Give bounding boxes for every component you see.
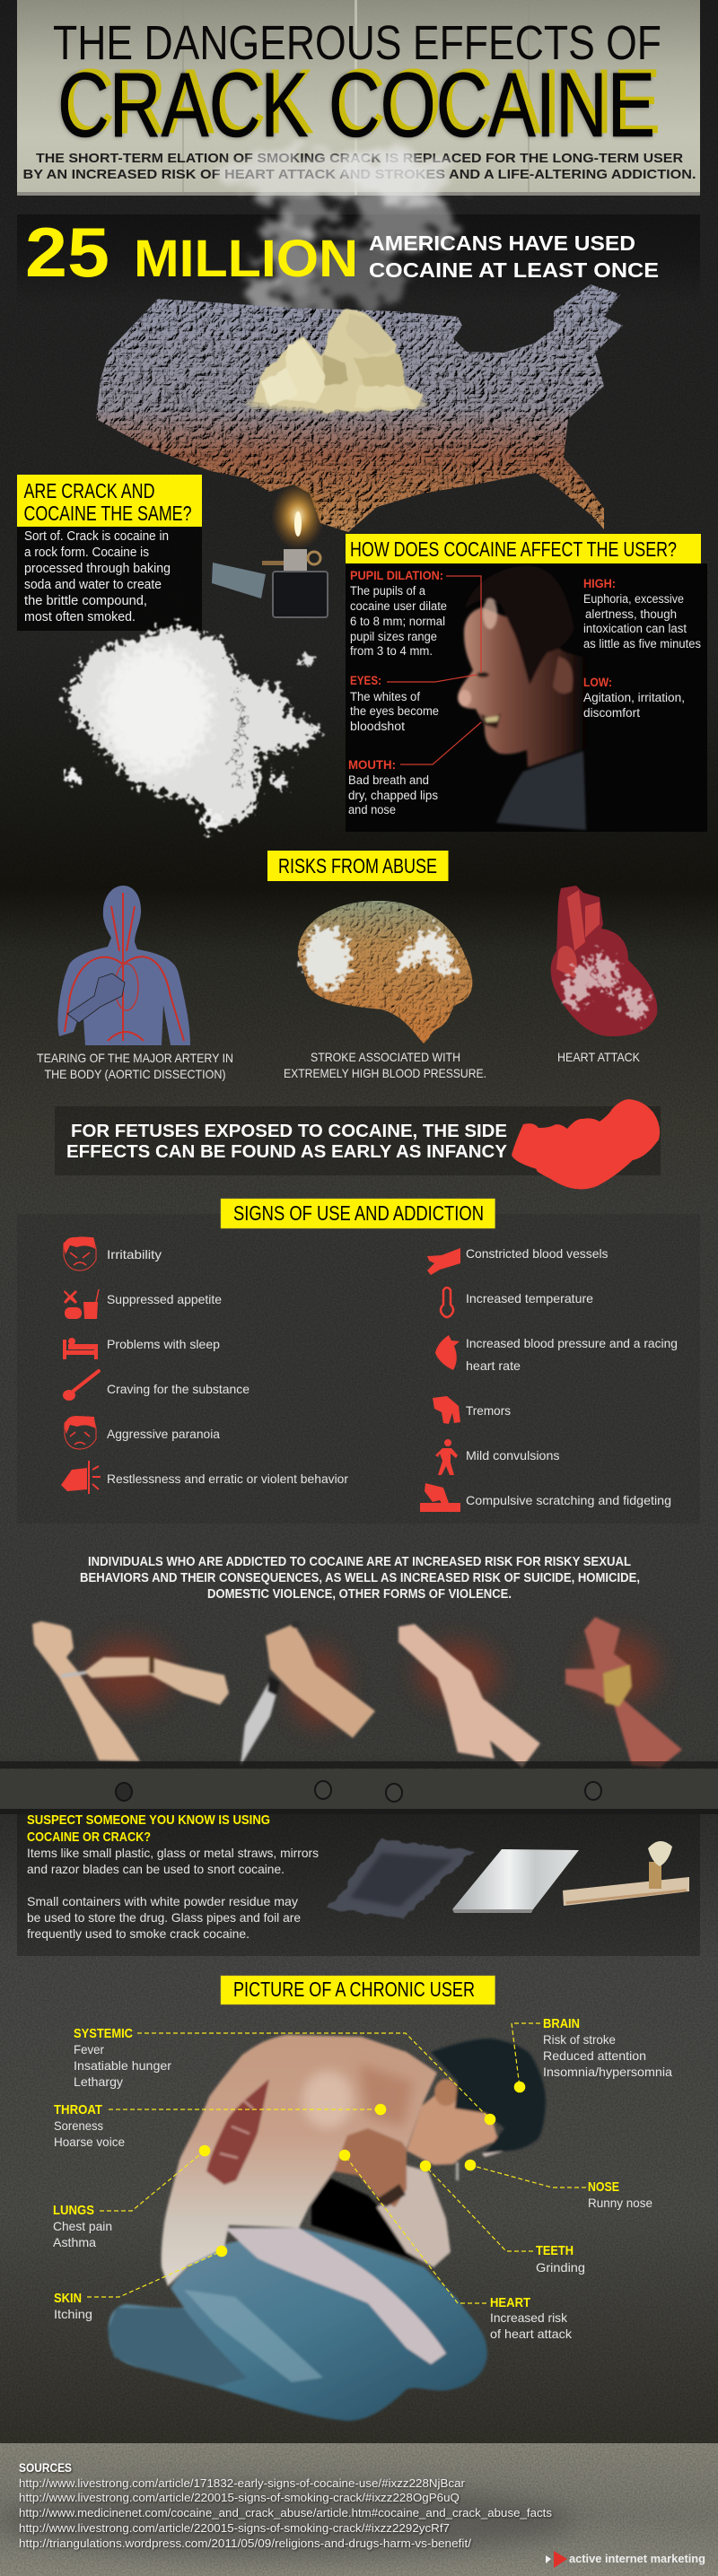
body text: most often smoked.: [24, 609, 136, 624]
callout: pupil dilation: pupil sizes range: [350, 630, 437, 643]
callout: pupil dilation: from 3 to 4 mm.: [350, 644, 433, 658]
icon: lighter: [212, 482, 328, 617]
callout: lungs: Chest pain: [53, 2219, 112, 2233]
heading: [221, 1199, 495, 1228]
callout: high: HIGH:: [583, 576, 616, 590]
red splatters: [87, 1635, 657, 1727]
section: picture of a chronic user: [53, 1976, 672, 2421]
blood pressure text: Increased blood pressure and a racing: [466, 1336, 678, 1350]
callout: throat: Soreness: [54, 2118, 103, 2133]
callout: teeth: Grinding: [536, 2260, 585, 2275]
yellow heading: COCAINE THE SAME?: [23, 502, 192, 525]
callout: eyes: the eyes become: [350, 704, 439, 718]
callout: lungs: [53, 2145, 210, 2249]
text block: increased risks: BEHAVIORS AND THEIR CONSEQUENCES, AS WELL AS INCREASED RISK OF SUICIDE, HOMICIDE,: [80, 1571, 640, 1585]
callout: low: discomfort: [583, 706, 640, 720]
arm with knife: [241, 1621, 375, 1766]
illustration: kneeling man: [108, 2035, 546, 2421]
heading: PICTURE OF A CHRONIC USER: [233, 1978, 475, 2001]
right column items: Tremors: [466, 1403, 511, 1418]
left column items: Aggressive paranoia: [107, 1427, 220, 1441]
callout: pupil dilation: [350, 568, 481, 673]
headline: 25 million: MILLION: [134, 230, 358, 288]
icon: convulsing person: [435, 1439, 458, 1475]
icon: bed: [63, 1338, 98, 1359]
body text: [17, 527, 202, 631]
white cocaine powder pile: [64, 625, 320, 830]
callout: skin: SKIN: [54, 2291, 82, 2306]
headline: 25 million: 25: [25, 213, 109, 292]
callout: mouth: and nose: [348, 803, 396, 816]
icon: glass pipe: [563, 1841, 689, 1906]
callout: mouth: MOUTH:: [348, 757, 396, 772]
callout: pupil dilation: 6 to 8 mm; normal: [350, 615, 445, 628]
icon: food crossed out: [64, 1289, 99, 1319]
heading: [221, 1976, 495, 2004]
text block: increased risks: INDIVIDUALS WHO ARE ADDICTED TO COCAINE ARE AT INCREASED RISK FOR RISKY SEXUAL: [88, 1555, 631, 1569]
left column items: Restlessness and erratic or violent behavior: [107, 1471, 348, 1486]
panel: suspect someone you know: [17, 1812, 700, 1956]
statistic band: [17, 214, 700, 304]
right column items: Increased temperature: [466, 1291, 593, 1305]
body text: the brittle compound,: [24, 593, 147, 608]
heading: SIGNS OF USE AND ADDICTION: [233, 1201, 484, 1225]
callout: brain: BRAIN: [543, 2016, 580, 2031]
panel background: [346, 563, 707, 832]
callout: nose: Runny nose: [588, 2196, 652, 2210]
icon: tremor hand: [433, 1396, 460, 1424]
americans have used: COCAINE AT LEAST ONCE: [369, 258, 659, 282]
source links: http://www.livestrong.com/article/220015-signs-of-smoking-crack/#ixzz2292ycRf7: [19, 2521, 450, 2535]
headline: 25 million: [25, 213, 659, 292]
right column items: [420, 1246, 678, 1512]
left column items: Irritability: [107, 1247, 162, 1262]
subtitle: THE SHORT-TERM ELATION OF SMOKING CRACK IS REPLACED FOR THE LONG-TERM USER: [36, 151, 683, 166]
text block: increased risks: [80, 1555, 640, 1602]
yellow heading: ARE CRACK AND: [23, 479, 154, 502]
body text: be used to store the drug. Glass pipes and foil are: [27, 1910, 301, 1925]
callout: heart: HEART: [490, 2295, 530, 2310]
callout: brain: Insomnia/hypersomnia: [543, 2065, 672, 2079]
body text: Items like small plastic, glass or metal straws, mirrors: [27, 1846, 319, 1860]
callout: lungs: LUNGS: [53, 2203, 94, 2218]
heading: [27, 1812, 270, 1845]
body text: a rock form. Cocaine is: [24, 545, 149, 560]
callout: brain: Reduced attention: [543, 2048, 646, 2063]
arm gripped: [398, 1624, 540, 1768]
callout: heart: [339, 2150, 573, 2341]
callout: systemic: [74, 2026, 495, 2125]
arm bound with rope: [565, 1617, 682, 1768]
exposed lungs: [206, 2079, 269, 2185]
callout: mouth: Bad breath and: [348, 773, 429, 787]
icon: scratching hand: [420, 1483, 460, 1512]
subtitle: [23, 151, 696, 182]
body text: soda and water to create: [24, 577, 162, 592]
callout: systemic: SYSTEMIC: [74, 2026, 133, 2041]
source links: http://www.livestrong.com/article/220015-signs-of-smoking-crack/#ixzz228OgP6uQ: [19, 2491, 460, 2504]
section: risks from abuse: [37, 851, 657, 1081]
caption: HEART ATTACK: [557, 1050, 641, 1064]
metal bar: [0, 1761, 718, 1814]
yellow heading: [17, 475, 202, 527]
caption: EXTREMELY HIGH BLOOD PRESSURE.: [284, 1066, 486, 1080]
callout: nose: NOSE: [588, 2179, 619, 2195]
source links: http://www.livestrong.com/article/171832-early-signs-of-cocaine-use/#ixzz228NjBcar: [19, 2476, 466, 2490]
right column items: Mild convulsions: [466, 1448, 560, 1463]
illustration: heart: [551, 886, 657, 1036]
forearm and hand: [377, 2165, 451, 2267]
heading: COCAINE OR CRACK?: [27, 1829, 151, 1845]
callout: skin: [54, 2246, 227, 2321]
callout: pupil dilation: PUPIL DILATION:: [350, 568, 443, 582]
callout: heart: of heart attack: [490, 2327, 573, 2341]
body text: processed through baking: [24, 561, 171, 576]
callout: fetuses exposed to cocaine: EFFECTS CAN BE FOUND AS EARLY AS INFANCY: [66, 1142, 508, 1162]
icon: angry face: [64, 1237, 96, 1271]
caption: THE BODY (AORTIC DISSECTION): [45, 1067, 226, 1081]
callout: mouth: dry, chapped lips: [348, 789, 438, 802]
heading: [267, 851, 449, 881]
smoke: [215, 148, 458, 325]
source links: [19, 2476, 553, 2550]
head: face: [407, 2086, 498, 2165]
crack rocks: [247, 310, 426, 412]
callout: throat: THROAT: [54, 2102, 102, 2118]
callout: high: Euphoria, excessive: [583, 592, 684, 606]
callout: eyes: EYES:: [350, 673, 381, 687]
illustration: body with arteries: [57, 886, 190, 1045]
caption: [284, 1050, 486, 1080]
callout: systemic: Lethargy: [74, 2074, 123, 2089]
source links: http://triangulations.wordpress.com/2011/05/09/religions-and-drugs-harm-vs-benefit/: [19, 2537, 471, 2550]
callout: eyes: bloodshot: [350, 720, 405, 733]
callout: eyes: The whites of: [350, 690, 420, 703]
head: hair: [431, 2039, 546, 2153]
left column items: [61, 1237, 348, 1494]
sources heading: SOURCES: [19, 2460, 72, 2475]
illustration: four violent arms: [32, 1617, 682, 1768]
icon: paranoid face: [65, 1416, 96, 1449]
callout: systemic: Insatiable hunger: [74, 2058, 171, 2073]
callout: low: LOW:: [583, 675, 612, 689]
left column items: Suppressed appetite: [107, 1292, 222, 1306]
forearm resting on thigh: [224, 2228, 446, 2364]
heading: SUSPECT SOMEONE YOU KNOW IS USING: [27, 1812, 270, 1828]
americans have used: AMERICANS HAVE USED: [369, 231, 635, 255]
blood pressure text: heart rate: [466, 1358, 521, 1373]
arm with razor: [32, 1621, 229, 1761]
subtitle: BY AN INCREASED RISK OF HEART ATTACK AND STROKES AND A LIFE-ALTERING ADDICTION.: [23, 167, 696, 182]
callout: high: alertness, though: [585, 607, 677, 621]
logo: active internet marketing: [546, 2551, 705, 2568]
torso: [162, 2035, 437, 2286]
callout: brain: [512, 2016, 672, 2092]
americans have used: [369, 231, 659, 282]
left column items: Craving for the substance: [107, 1382, 250, 1396]
callout: pupil dilation: cocaine user dilate: [350, 599, 447, 613]
icon: foil sheet: [328, 1839, 474, 1918]
callout: teeth: TEETH: [536, 2243, 574, 2258]
callout: pupil dilation: The pupils of a: [350, 584, 425, 598]
callout: low: [583, 675, 685, 720]
icon: heart: [435, 1335, 460, 1370]
source links: http://www.medicinenet.com/cocaine_and_crack_abuse/article.htm#cocaine_and_crack_abuse_facts: [19, 2506, 553, 2519]
callout: high: [583, 576, 701, 651]
body text: Sort of. Crack is cocaine in: [24, 528, 169, 544]
callout: fetuses exposed to cocaine: [55, 1099, 661, 1189]
callout: nose: [465, 2160, 652, 2210]
right column items: Constricted blood vessels: [466, 1246, 609, 1261]
body text: frequently used to smoke crack cocaine.: [27, 1926, 250, 1941]
icon: spoon: [63, 1371, 99, 1401]
icon: fist: [61, 1461, 101, 1494]
body text: [27, 1846, 319, 1941]
black gap under torso: [311, 2178, 419, 2261]
callout: high: intoxication can last: [583, 622, 687, 635]
callout: throat: [54, 2102, 386, 2149]
icon: blood vessel: [427, 1248, 460, 1275]
footer: sources: [0, 2443, 718, 2576]
jeans: [109, 2228, 487, 2421]
caption: TEARING OF THE MAJOR ARTERY IN: [37, 1051, 233, 1065]
text block: increased risks: DOMESTIC VIOLENCE, OTHER FORMS OF VIOLENCE.: [207, 1587, 512, 1602]
body text: and razor blades can be used to snort cocaine.: [27, 1862, 285, 1876]
callout: teeth: [420, 2161, 585, 2275]
poster header panel: [17, 0, 700, 196]
right column items: Compulsive scratching and fidgeting: [466, 1493, 671, 1507]
illustration: face of a user: [458, 565, 586, 830]
icon: mirror: [452, 1849, 579, 1913]
panel: are crack and cocaine the same: [17, 475, 202, 631]
blood pressure text: [466, 1336, 678, 1373]
logo: active internet marketing: active internet marketing: [569, 2552, 705, 2565]
callout: heart: Increased risk: [490, 2310, 568, 2325]
callout: fetuses exposed to cocaine: FOR FETUSES EXPOSED TO COCAINE, THE SIDE: [71, 1122, 507, 1141]
callout: skin: Itching: [54, 2307, 92, 2321]
illustration: brain: [296, 901, 472, 1043]
heading: RISKS FROM ABUSE: [278, 854, 437, 878]
callout: eyes: [350, 673, 477, 733]
callout: brain: Risk of stroke: [543, 2032, 616, 2047]
callout: high: as little as five minutes: [583, 637, 701, 651]
callout: low: Agitation, irritation,: [583, 691, 685, 704]
body text: Small containers with white powder residue may: [27, 1894, 298, 1908]
icon: fetus: [512, 1099, 660, 1189]
caption: [37, 1051, 233, 1081]
panel: signs of use and addiction: [17, 1199, 700, 1524]
caption: STROKE ASSOCIATED WITH: [311, 1050, 460, 1064]
foil map of the United States: [90, 278, 628, 538]
callout: mouth: [348, 722, 481, 816]
left column items: Problems with sleep: [107, 1337, 220, 1351]
icon: thermometer: [441, 1288, 453, 1317]
callout: lungs: Asthma: [53, 2235, 96, 2249]
panel: how does cocaine affect the user: [346, 534, 707, 832]
callout: throat: Hoarse voice: [54, 2135, 125, 2149]
callout: systemic: Fever: [74, 2042, 104, 2056]
runny nose drip: [456, 2162, 459, 2180]
